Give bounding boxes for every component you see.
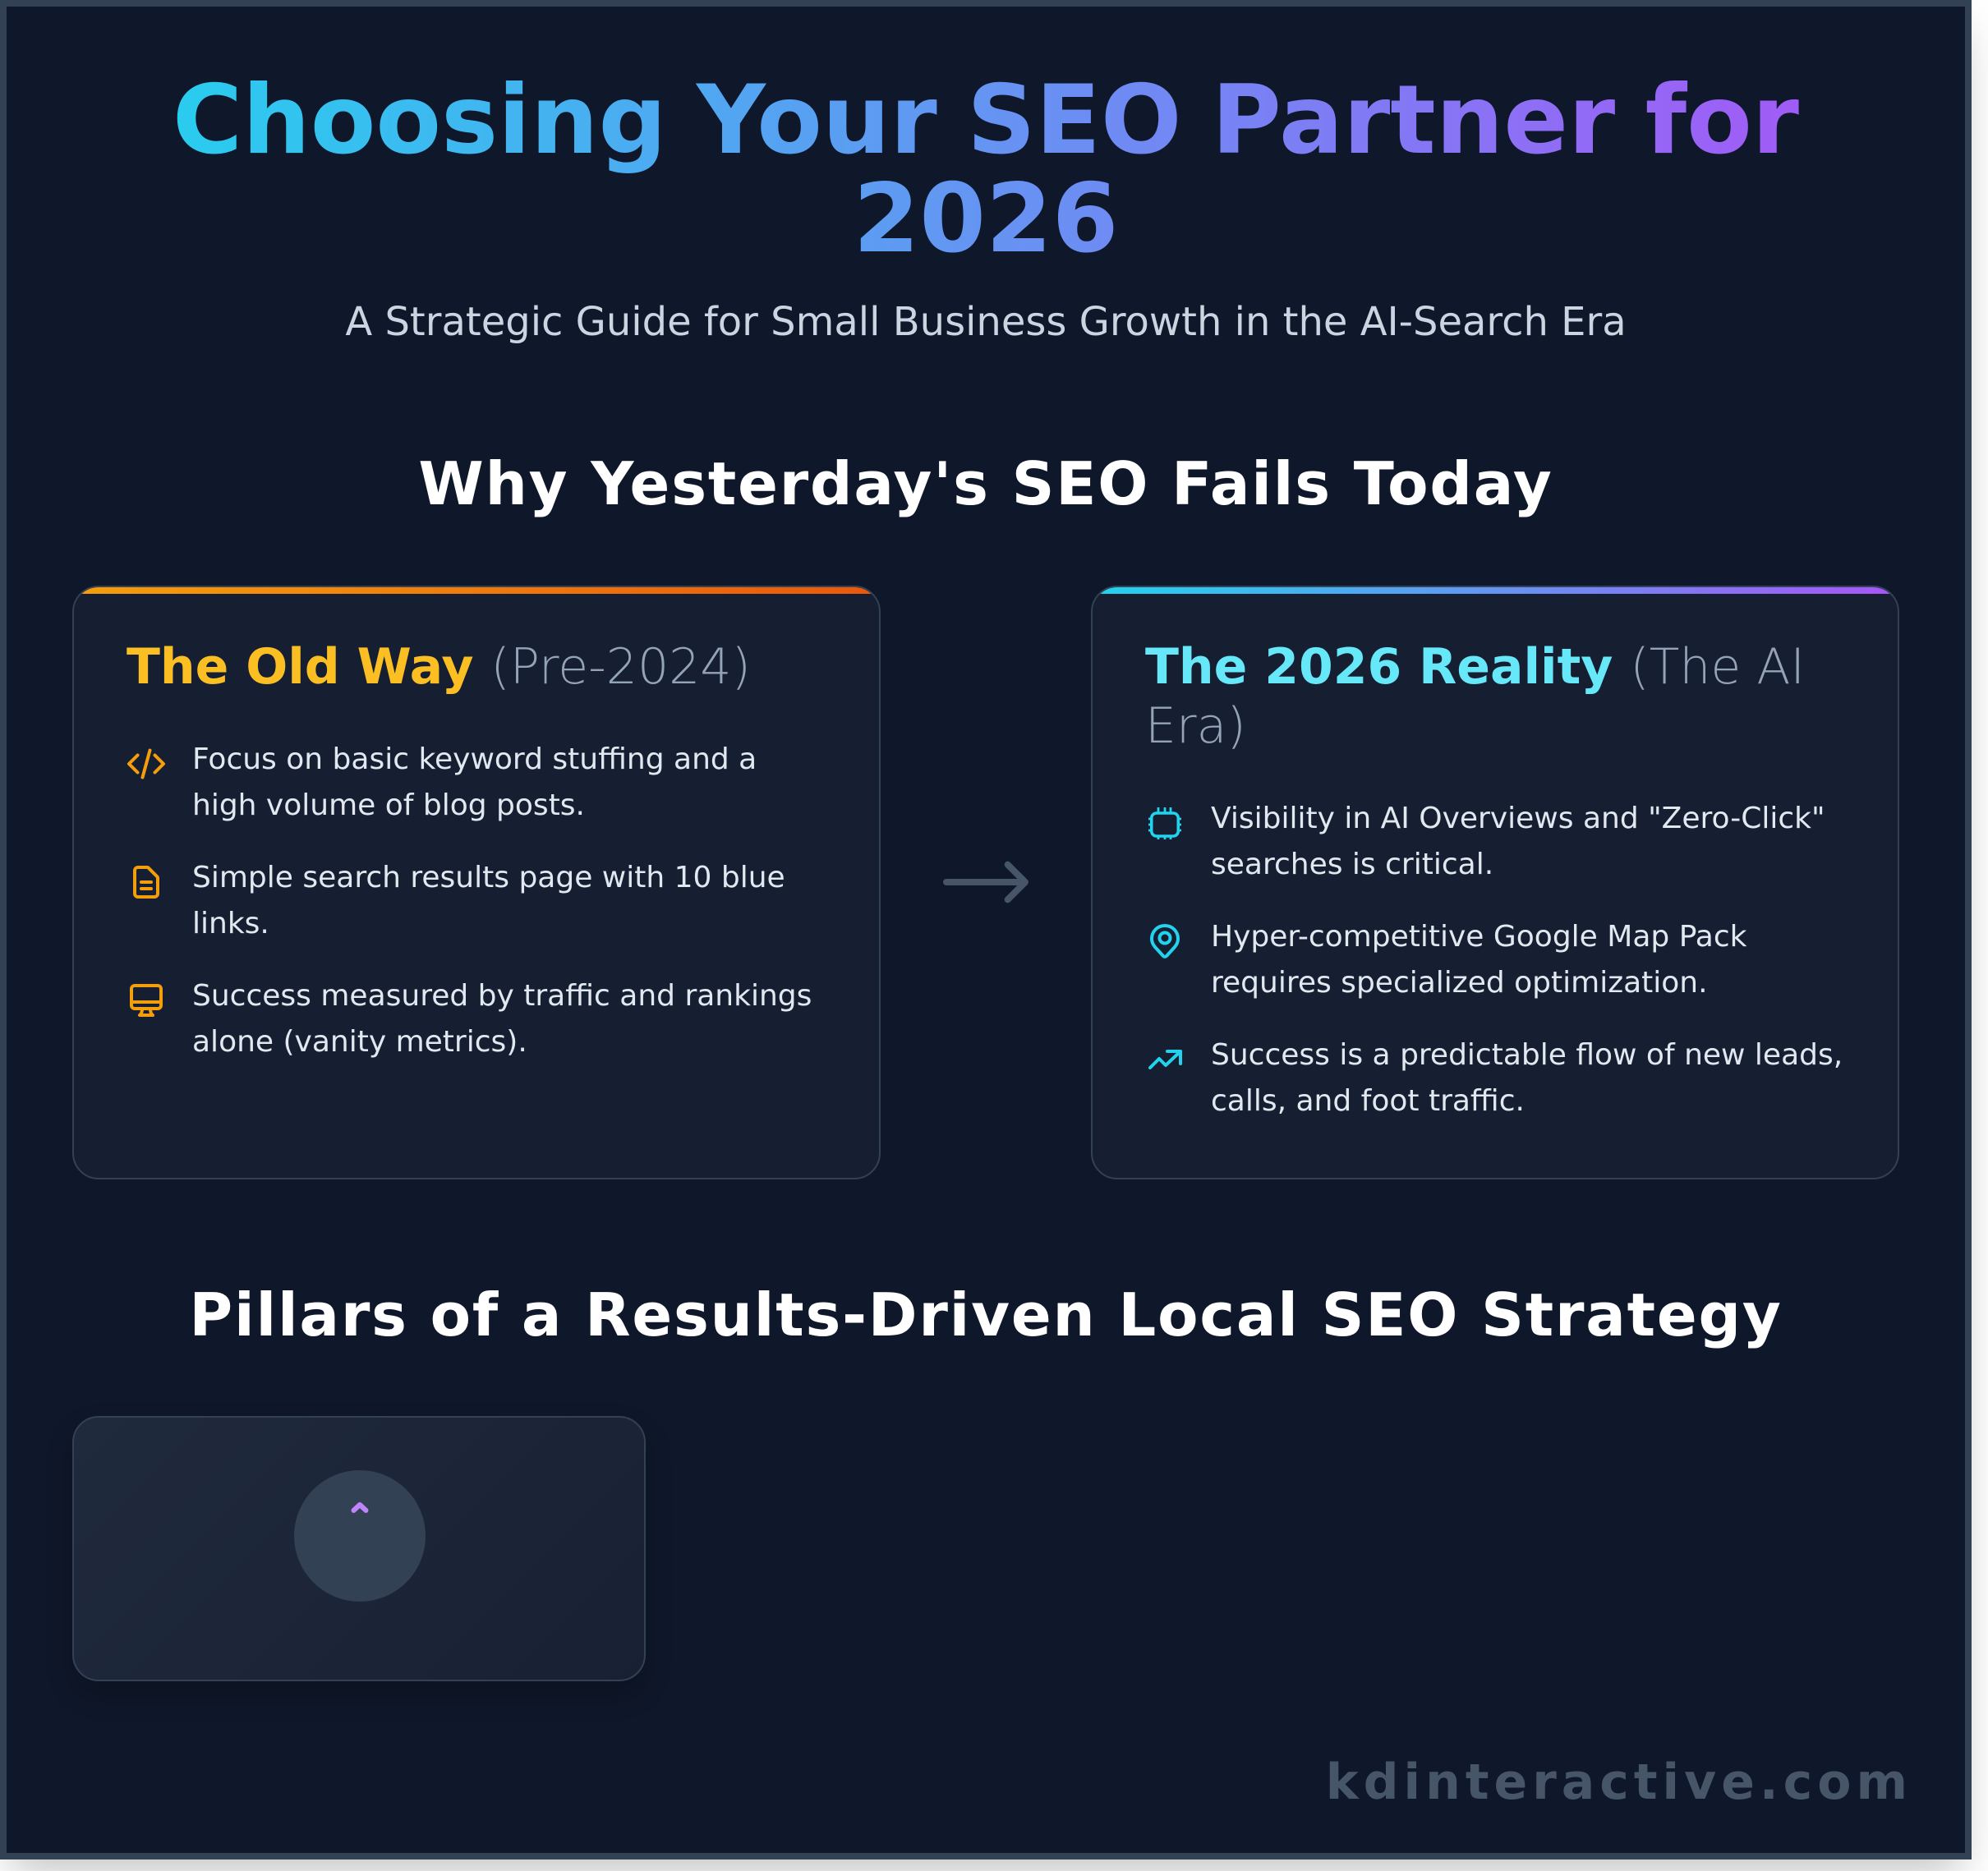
text: vanity metrics: Success measured by traffic and rankings [192, 979, 812, 1013]
icon: map pin [1150, 924, 1180, 958]
text: simple results page [192, 861, 785, 940]
text: vanity metrics: alone (vanity metrics). [192, 1025, 527, 1059]
heading: the 2026 reality: The 2026 Reality (The AI [1145, 638, 1805, 696]
text: vanity metrics [192, 979, 812, 1059]
icon: document [133, 866, 159, 899]
cyan to purple gradient top bar [1093, 587, 1898, 594]
text: predictable leads: calls, and foot traffic. [1211, 1084, 1525, 1118]
heading: pillars: Pillars of a Results-Driven Local SEO Strategy [189, 1280, 1783, 1349]
heading: why yesterday's SEO fails: Why Yesterday's SEO Fails Today [418, 449, 1553, 518]
heading: the 2026 reality: Era) [1145, 697, 1246, 755]
title: Choosing Your SEO Partner for [173, 65, 1799, 176]
icon: trend up [1148, 1050, 1182, 1069]
panel: pillar card [72, 1416, 646, 1681]
panel: the old way [72, 586, 881, 1179]
subtitle: A Strategic Guide for Small Business Growth in the AI-Search Era [345, 299, 1627, 345]
heading: the 2026 reality [1145, 638, 1805, 755]
icon circle with chevron [294, 1470, 426, 1602]
text: simple results page: links. [192, 907, 269, 940]
text: map pack: requires specialized optimization. [1211, 966, 1708, 1000]
text: keyword stuffing: Focus on basic keyword stuffing and a [192, 742, 757, 776]
panel: the 2026 reality [1091, 586, 1899, 1179]
icon: chip [1148, 807, 1181, 839]
text: predictable leads: Success is a predictable flow of new leads, [1211, 1038, 1843, 1072]
text: AI overviews: Visibility in AI Overviews and "Zero-Click" [1211, 802, 1825, 835]
text: map pack [1211, 920, 1746, 1000]
arrow: old way to 2026 reality [943, 861, 1029, 903]
text: keyword stuffing [192, 742, 757, 822]
icon: chevron up [352, 1502, 368, 1513]
text: AI overviews [1211, 802, 1825, 881]
text: AI overviews: searches is critical. [1211, 848, 1493, 881]
text: predictable leads [1211, 1038, 1843, 1118]
orange gradient top bar [74, 587, 879, 594]
text: simple results page: Simple search results page with 10 blue [192, 861, 785, 894]
icon: desktop [130, 984, 163, 1017]
text: map pack: Hyper-competitive Google Map Pack [1211, 920, 1746, 954]
icon: code [127, 749, 166, 779]
title: 2026 [854, 163, 1118, 274]
text: keyword stuffing: high volume of blog posts. [192, 788, 585, 822]
heading: the old way: The Old Way (Pre-2024) [127, 638, 751, 696]
footer watermark: kdinteractive.com [1326, 1754, 1912, 1811]
title [72, 71, 1899, 269]
